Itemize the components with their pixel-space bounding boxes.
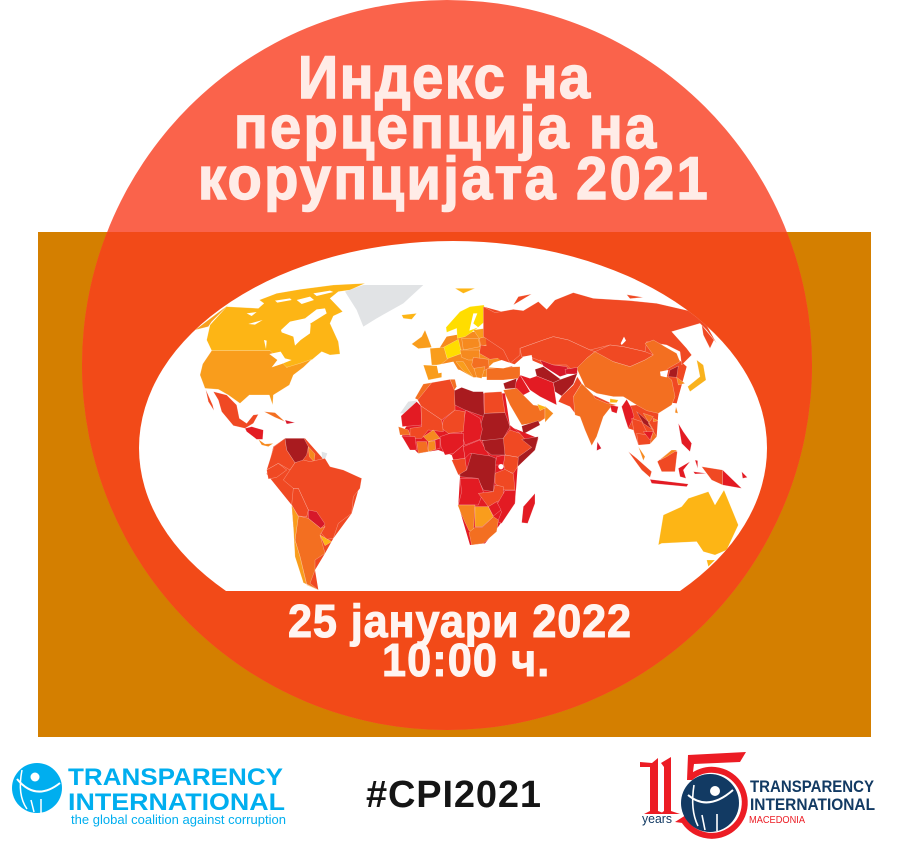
background panel: ochre rectangle	[38, 232, 871, 737]
map: Asia	[483, 293, 717, 451]
logo: Transparency International: the global coalition against corruption	[71, 812, 286, 827]
logo: Transparency International Macedonia 15 years	[640, 752, 875, 836]
logo: Transparency International Macedonia 15 years: years	[642, 811, 672, 826]
title: Индекс на	[298, 45, 591, 111]
date and time: 25 јануари 2022	[288, 597, 631, 647]
date and time	[288, 597, 631, 686]
icon: red 15	[640, 752, 746, 836]
world map of corruption index	[195, 283, 747, 591]
title	[198, 45, 708, 212]
logo: Transparency International	[12, 763, 286, 827]
large coral circle	[82, 0, 812, 730]
icon: navy globe	[681, 774, 739, 832]
title: перцепција на	[234, 95, 657, 161]
date and time: 10:00 ч.	[382, 636, 549, 686]
logo: Transparency International: TRANSPARENCY	[68, 764, 283, 791]
map: Europe	[412, 288, 508, 380]
logo: Transparency International: INTERNATIONAL	[68, 789, 285, 816]
logo: Transparency International Macedonia 15 years: TRANSPARENCY	[750, 778, 874, 796]
hashtag: #CPI2021	[366, 774, 541, 816]
logo: Transparency International Macedonia 15 years: MACEDONIA	[749, 815, 805, 826]
map: South-East Asia and Oceania	[628, 423, 747, 567]
title: корупцијата 2021	[198, 146, 708, 212]
map: North America	[195, 283, 423, 439]
icon: TI globe	[12, 763, 62, 813]
logo: Transparency International Macedonia 15 years: INTERNATIONAL	[750, 796, 875, 814]
map: Africa	[398, 379, 538, 545]
map: South America	[258, 438, 362, 591]
white map ellipse	[139, 241, 767, 591]
